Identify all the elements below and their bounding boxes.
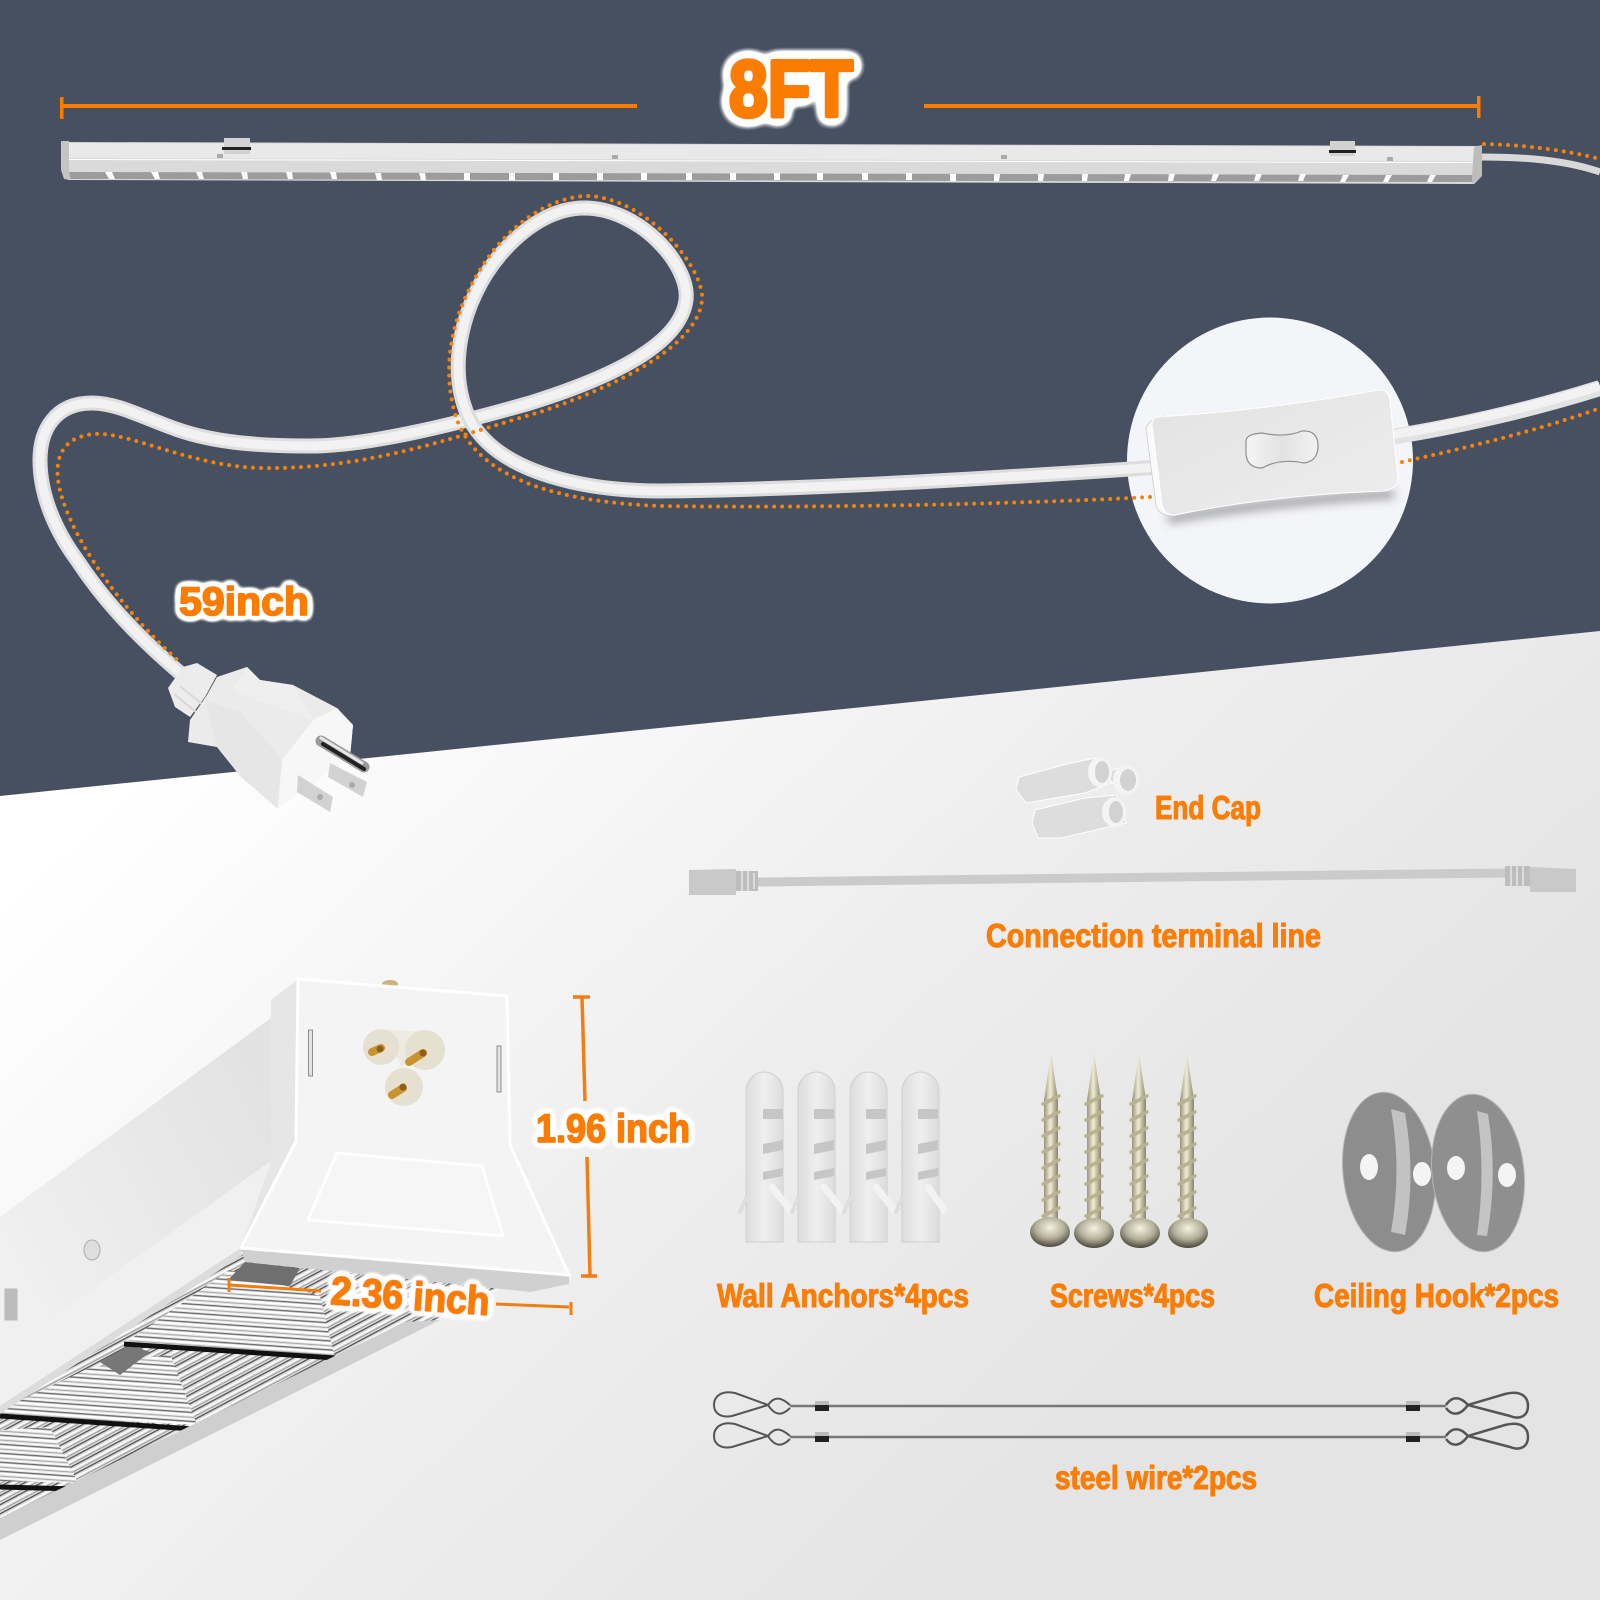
power cord, switch side	[458, 208, 1160, 491]
8FT dimension line, left	[60, 97, 637, 119]
plug blades	[328, 763, 367, 797]
ceiling hooks	[1335, 1088, 1532, 1256]
1.96 inch dimension lines	[573, 997, 597, 1276]
1.96 inch label: 1.96 inch	[536, 1107, 690, 1151]
light bar	[61, 138, 1600, 184]
Screws label: Screws*4pcs	[1050, 1277, 1215, 1314]
fixture end plate	[241, 979, 298, 1248]
louver reflector section	[0, 1250, 505, 1540]
power cord, plug side	[40, 208, 686, 673]
End Cap label: End Cap	[1155, 789, 1261, 826]
end cap part	[1016, 757, 1139, 838]
wall anchors	[740, 1072, 944, 1242]
black reflector dividers	[0, 1344, 335, 1489]
2.36 inch label: 2.36 inch	[329, 1269, 491, 1324]
Ceiling Hook label: Ceiling Hook*2pcs	[1314, 1277, 1559, 1314]
bar end cord	[1480, 157, 1600, 172]
Wall Anchors label: Wall Anchors*4pcs	[717, 1277, 969, 1314]
connection terminal line part	[689, 866, 1576, 895]
switch highlight circle	[1127, 318, 1413, 604]
8FT heading: 8FT	[729, 44, 853, 133]
power plug	[168, 663, 367, 812]
orange dotted length guides	[57, 144, 1600, 664]
steel wires	[714, 1392, 1528, 1449]
8FT dimension line, right	[924, 96, 1480, 118]
59inch label: 59inch	[179, 580, 309, 624]
plug ground pin	[321, 741, 364, 767]
power cord, right side of switch	[1390, 386, 1600, 437]
inline rocker switch	[1146, 390, 1398, 519]
steel wire label: steel wire*2pcs	[1055, 1459, 1257, 1496]
fixture side faces	[0, 1018, 271, 1356]
light lower background panel	[0, 631, 1600, 1600]
screws	[1030, 1053, 1208, 1248]
Connection terminal line label: Connection terminal line	[986, 917, 1321, 954]
fixture close-up	[0, 979, 569, 1540]
2.36 inch dimension lines	[229, 1278, 571, 1315]
fixture connector sockets	[363, 1029, 445, 1106]
